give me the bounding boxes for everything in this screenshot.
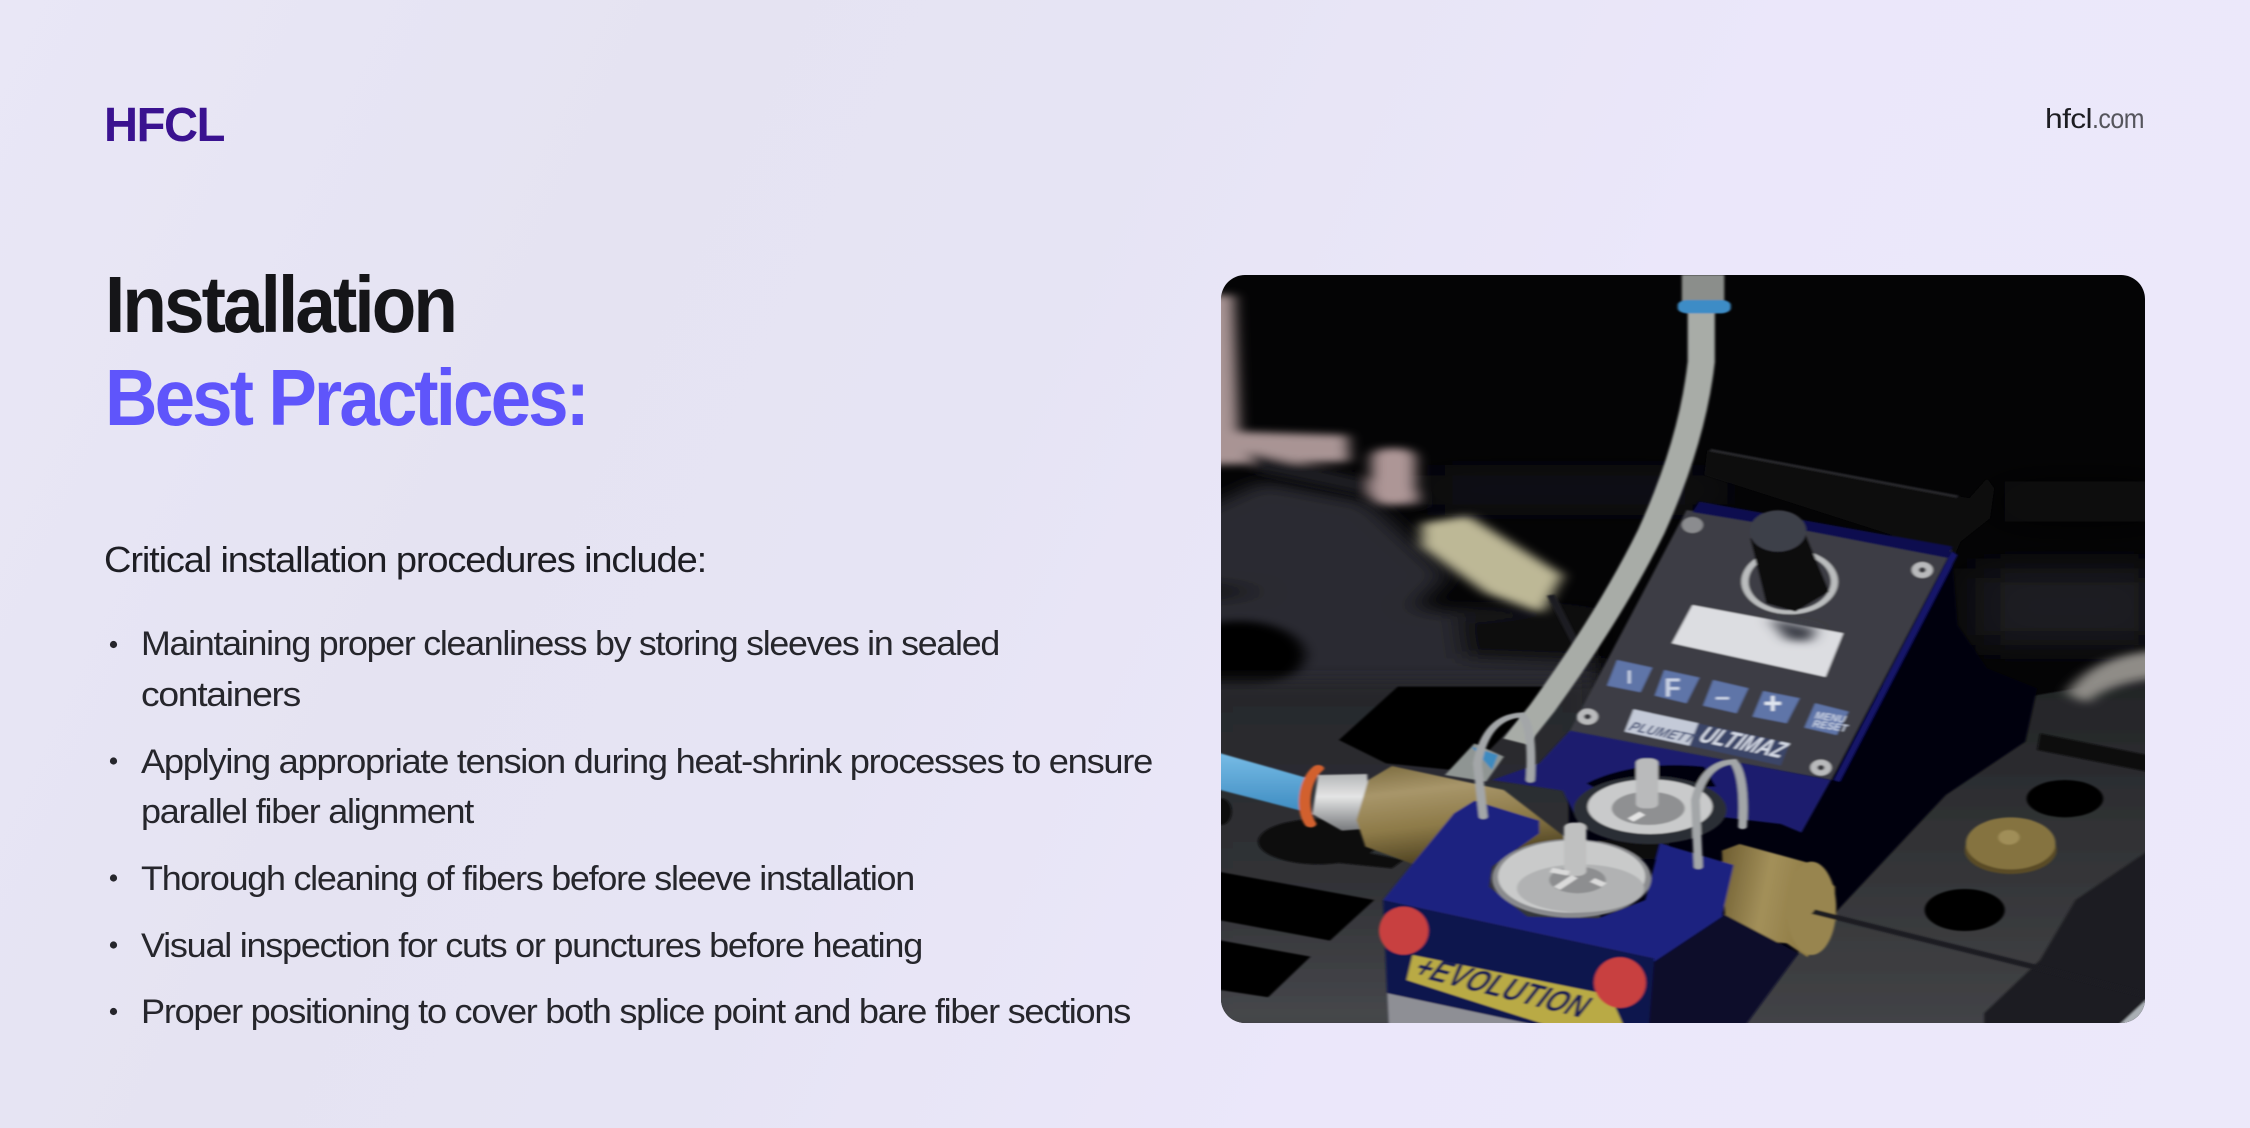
website: hfcl.com [2045, 103, 2144, 134]
title line: Best Practices: Best Practices: [105, 353, 587, 442]
photo detail: LCD display [1672, 605, 1843, 677]
photo detail: keypad buttons: – [1715, 684, 1730, 711]
photo detail: grey tube [1516, 275, 1731, 742]
photo: fusion splicer heat-shrink oven in foam case [1173, 275, 2164, 1033]
photo detail: EVOLUTION label: +EVOLUTION [1406, 950, 1600, 1024]
bullet: tension: parallel fiber alignment [141, 793, 475, 831]
photo detail: blue hose and connector [1218, 753, 1371, 831]
photo detail: keypad buttons [1607, 660, 1850, 735]
intro sentence: Critical installation procedures include: [104, 539, 706, 580]
photo detail: brass disk [1965, 817, 2057, 874]
bullet: tension [110, 743, 1152, 831]
photo detail: cable sleeve behind handle [1445, 743, 1504, 782]
photo detail: back disc and pin [1573, 758, 1727, 860]
photo detail: handle bar behind panel [1704, 450, 1994, 555]
photo detail: left brass cylinder [1357, 766, 1569, 865]
photo detail: front block [1383, 801, 1799, 1033]
photo detail: blurred background case and lid [1221, 289, 2145, 692]
title [105, 260, 587, 442]
photo detail: keypad buttons: I [1626, 668, 1632, 688]
photo detail: knob [1745, 510, 1834, 612]
logo: HFCL: HFCL [104, 99, 224, 152]
photo detail: keypad buttons: F [1664, 673, 1681, 703]
photo detail: machine body and control panel [1568, 448, 2036, 954]
photo detail: navy base plate [1492, 731, 1831, 845]
photo detail: red caps [1379, 907, 1646, 1008]
website: hfcl.com: .com [2092, 103, 2144, 134]
photo detail: keypad buttons: RESET [1810, 718, 1850, 735]
photo detail: keypad buttons: + [1763, 687, 1782, 720]
photo detail: fiber strand [1813, 912, 2164, 999]
photo detail: front disc and pin [1492, 823, 1651, 918]
bullet list [110, 625, 1152, 1031]
bullet: cleaning: Thorough cleaning of fibers before sleeve installation [141, 860, 914, 898]
photo detail: keypad buttons: MENU [1813, 710, 1848, 726]
bullet: tension: Applying appropriate tension during heat-shrink processes to ensure [141, 743, 1152, 781]
photo detail: brand plate: ULTIMAZ [1694, 722, 1793, 764]
bullet: cleanliness: Maintaining proper cleanliness by storing sleeves in sealed [141, 625, 999, 663]
bullet: cleanliness [110, 625, 999, 714]
title line: Installation: Installation [105, 260, 455, 349]
photo detail: panel screws [1577, 517, 1933, 776]
photo detail: brass end right [1722, 844, 1836, 957]
bullet: positioning: Proper positioning to cover both splice point and bare fiber sections [141, 993, 1130, 1031]
photo detail: oven assembly [1221, 712, 2058, 1023]
photo detail: steel handles [1477, 715, 1743, 867]
website: hfcl.com: hfcl [2045, 103, 2092, 134]
photo detail: brand plate: PLUMETT [1625, 720, 1699, 747]
photo detail: brand plate [1625, 709, 1793, 766]
bullet: inspection: Visual inspection for cuts or punctures before heating [141, 927, 922, 965]
bullet: cleanliness: containers [141, 676, 300, 714]
photo detail: lower foam tray [1197, 650, 2164, 1033]
